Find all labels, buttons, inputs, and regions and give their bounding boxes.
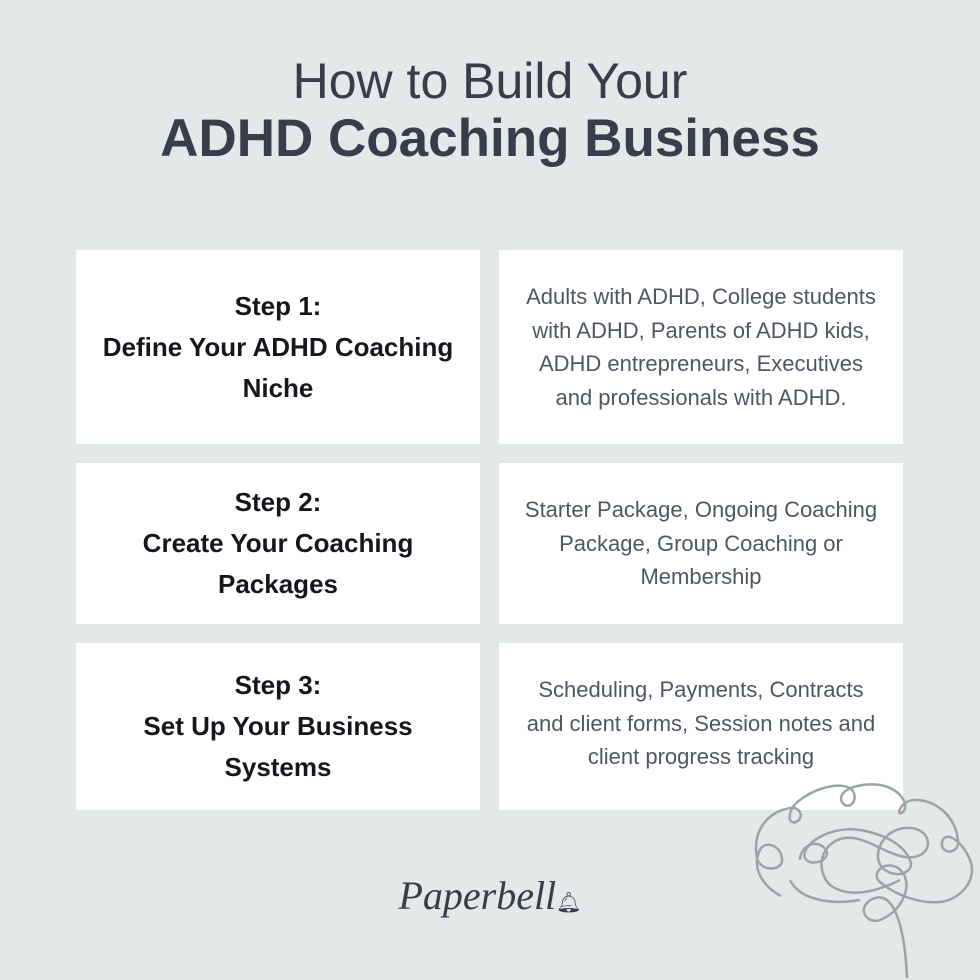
title: [160, 53, 820, 168]
panel: step 1 details: and professionals with ADHD.: [555, 384, 846, 410]
panel: step 2 details: Membership: [640, 564, 762, 589]
panel: step 1 details: Adults with ADHD, College students: [526, 284, 876, 309]
panel: step 1 details: ADHD entrepreneurs, Executives: [539, 351, 863, 376]
text: ADHD Coaching Business: [160, 109, 820, 168]
panel: step 2 details: Starter Package, Ongoing Coaching: [525, 497, 877, 522]
panel: step 2: [76, 463, 480, 624]
panel: step 3: Systems: [225, 752, 331, 782]
panel: step 2 details: [499, 463, 903, 624]
panel: step 3 details: client progress tracking: [588, 744, 814, 769]
panel: step 1: Niche: [243, 372, 313, 402]
logo: Paperbell: Paperbell🔔︎: [398, 873, 582, 918]
panel: step 1: Define Your ADHD Coaching: [103, 332, 453, 362]
panel: step 1 details: [499, 250, 903, 444]
panel: step 1: Step 1:: [235, 290, 321, 320]
panel: step 2: Step 2:: [235, 487, 321, 517]
panel: step 2: Create Your Coaching: [143, 528, 413, 558]
panel: step 3 details: [499, 643, 903, 810]
panel: step 3 details: and client forms, Session notes and: [527, 711, 875, 736]
panel: step 1 details: with ADHD, Parents of ADHD kids,: [532, 318, 870, 342]
text: How to Build Your: [293, 53, 687, 109]
panel: step 3: Step 3:: [235, 670, 321, 700]
panel: step 3 details: Scheduling, Payments, Contracts: [538, 677, 864, 702]
panel: step 2: Packages: [218, 569, 338, 599]
panel: step 1: [76, 250, 480, 444]
panel: step 3: Set Up Your Business: [143, 711, 413, 741]
panel: step 2 details: Package, Group Coaching or: [559, 531, 843, 556]
panel: step 3: [76, 643, 480, 810]
